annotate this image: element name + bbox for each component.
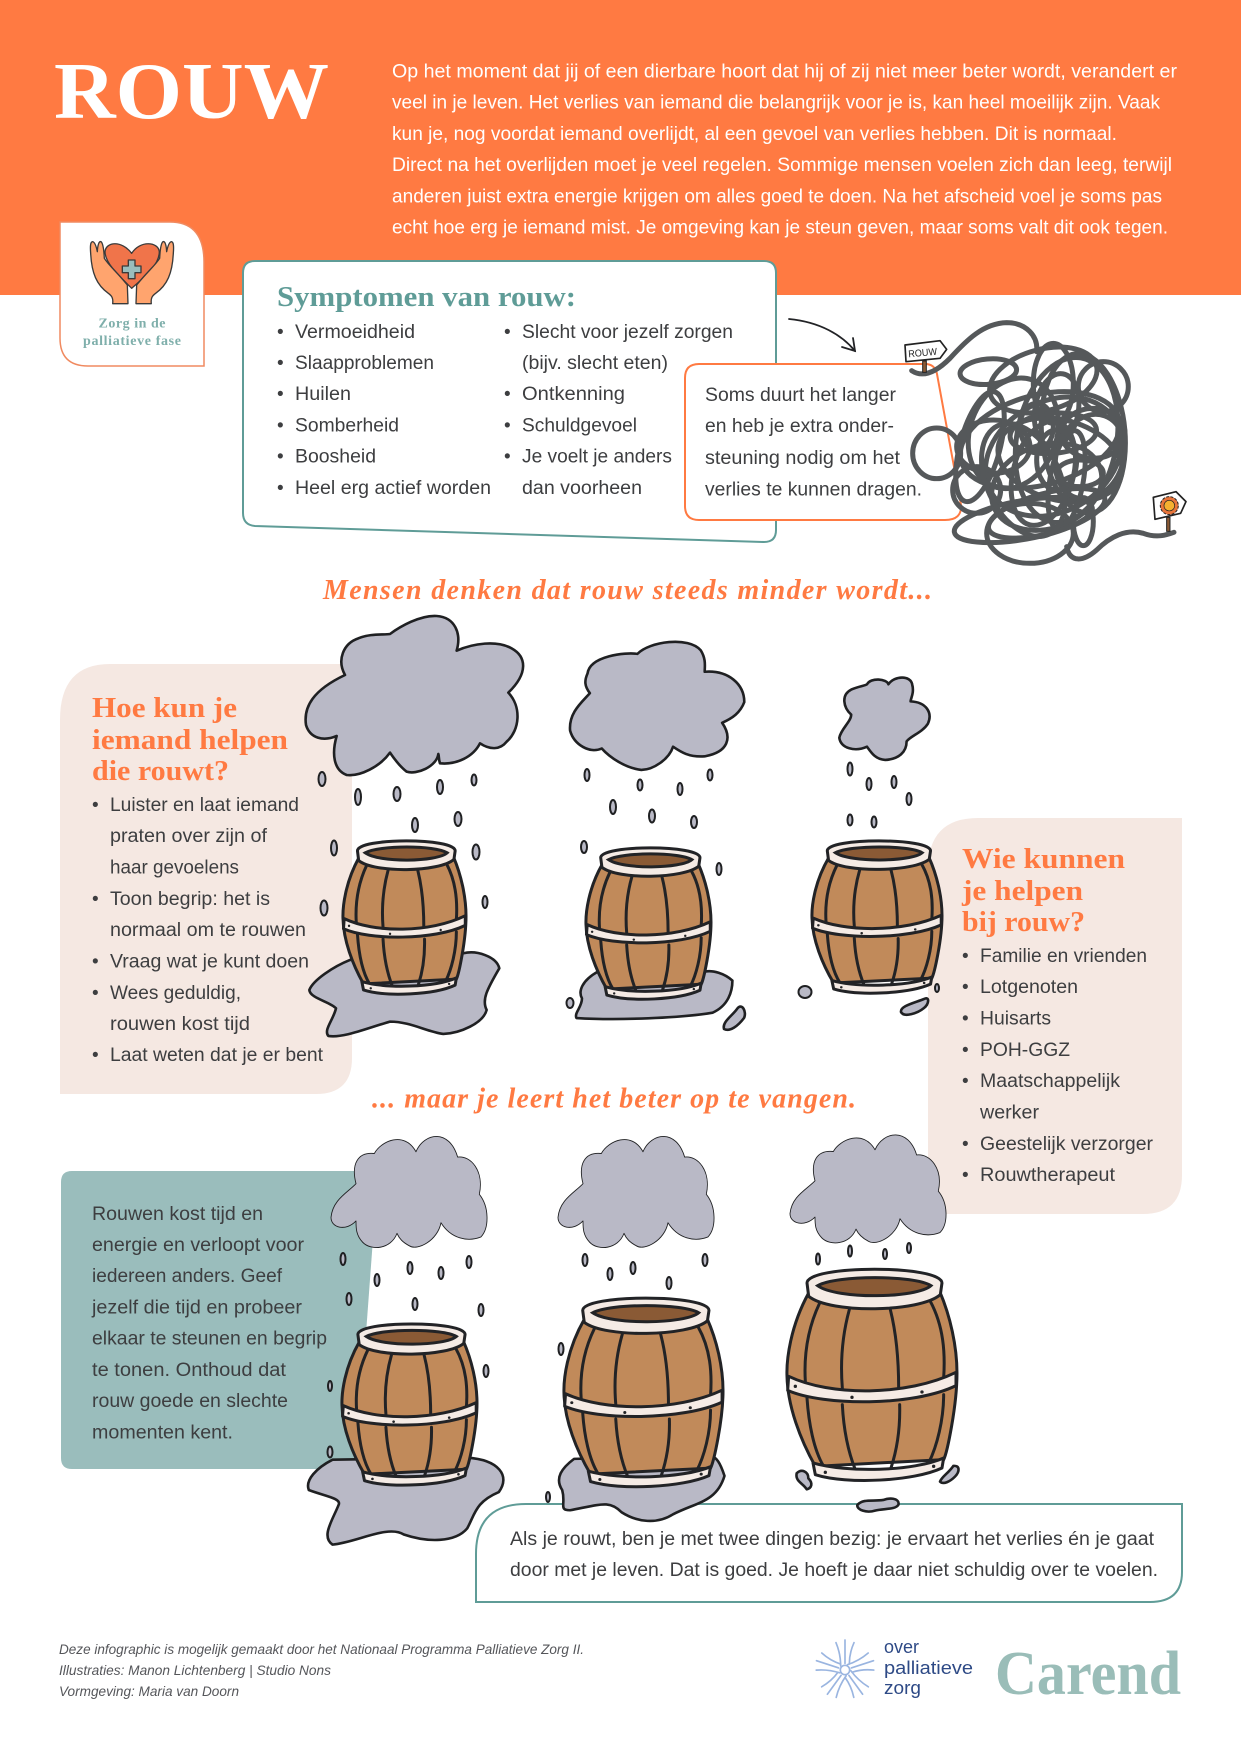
symptom list column 1: Boosheid: [295, 446, 376, 468]
symptom list column 1: •: [277, 384, 284, 405]
symptom list column 1: •: [277, 478, 284, 499]
text: wie kunnen je helpen: [961, 843, 1154, 1186]
list: helpers: POH-GGZ: [980, 1040, 1070, 1061]
symptom list column 2: Schuldgevoel: [522, 416, 637, 436]
intro text: kun je, nog voordat iemand overlijdt, al een gevoel van verlies hebben. Dit is normaal.: [392, 124, 1117, 145]
text: rouwen kost tijd: [91, 1204, 327, 1444]
orange header band: [0, 0, 1241, 295]
list: helpers: •: [962, 946, 969, 967]
illustration: barrel 2 medium cloud: [566, 642, 745, 1030]
symptom list column 2: •: [504, 322, 511, 343]
illustration: barrel 4: [308, 1136, 503, 1545]
symptom list column 2: •: [504, 416, 511, 436]
list: helpers: •: [962, 1008, 969, 1030]
intro text: echt hoe erg je iemand mist. Je omgeving kan je steun geven, maar soms valt dit ook tegen.: [392, 218, 1168, 238]
list: hulp tips: Vraag wat je kunt doen: [110, 952, 309, 972]
text: hoe kun je iemand helpen: [92, 692, 324, 1066]
symptom list column 2: [504, 322, 733, 499]
list: helpers: •: [962, 1165, 969, 1186]
list: hulp tips: normaal om te rouwen: [110, 920, 306, 941]
heading: hoe kun je: Hoe kun je: [92, 692, 237, 724]
list: hulp tips: Wees geduldig,: [110, 983, 241, 1004]
panel: teal message background: [61, 1171, 378, 1469]
list: hulp tips: •: [92, 952, 99, 972]
callout: soms duurt het langer: steuning nodig om het: [705, 448, 901, 469]
intro text: Direct na het overlijden moet je veel regelen. Sommige mensen voelen zich dan leeg, terwijl: [392, 155, 1172, 176]
footer credits: Illustraties: Manon Lichtenberg | Studio Nons: [59, 1662, 331, 1678]
heading: wie kunnen: je helpen: [961, 875, 1083, 907]
intro text: [392, 62, 1178, 238]
logo: over palliatieve zorg: [814, 1637, 973, 1700]
list: hulp tips: •: [92, 795, 99, 816]
logo: carend: Carend: [995, 1640, 1181, 1708]
symptom list column 1: •: [277, 416, 284, 436]
list: hulp tips: [92, 795, 324, 1066]
heading: hoe kun je: iemand helpen: [92, 724, 288, 756]
heading: mensen denken: Mensen denken dat rouw steeds minder wordt...: [322, 575, 932, 606]
illustration: barrel 1 big cloud: [306, 616, 523, 1036]
logo card: zorg in de palliatieve fase: Zorg in de: [98, 316, 166, 332]
list: hulp tips: •: [92, 889, 99, 910]
icon: hands holding heart: [90, 242, 174, 304]
logo card: zorg in de palliatieve fase: palliatieve fase: [83, 334, 181, 349]
heading: hoe kun je: die rouwt?: [92, 755, 229, 787]
list: hulp tips: •: [92, 1045, 99, 1066]
text: rouwen kost tijd: energie en verloopt voor: [92, 1235, 305, 1256]
logo: over palliatieve zorg: zorg: [884, 1678, 921, 1698]
symptom list column 1: Huilen: [295, 384, 351, 405]
symptom list column 1: [277, 322, 491, 499]
list: hulp tips: Laat weten dat je er bent: [110, 1045, 324, 1066]
tangled line from rouw to sun: [905, 323, 1186, 563]
symptom list column 2: Slecht voor jezelf zorgen: [522, 322, 733, 343]
symptom list column 2: •: [504, 446, 511, 468]
intro text: veel in je leven. Het verlies van iemand die belangrijk voor je is, kan heel moeilijk zijn. Vaak: [392, 92, 1160, 114]
heading: wie kunnen: [961, 843, 1125, 938]
callout: soms duurt het langer: [685, 364, 961, 520]
panel: wie kunnen je helpen background: [928, 818, 1182, 1214]
symptom list column 2: (bijv. slecht eten): [522, 353, 668, 374]
callout: twee dingen: [476, 1504, 1182, 1602]
list: helpers: [962, 946, 1154, 1186]
list: helpers: •: [962, 1071, 969, 1092]
symptom list column 1: •: [277, 446, 284, 468]
logo card: zorg in de palliatieve fase: [60, 222, 204, 366]
symptom list column 2: dan voorheen: [522, 478, 642, 499]
callout: twee dingen: Als je rouwt, ben je met twee dingen bezig: je ervaart het verlies én je gaat: [510, 1529, 1155, 1550]
callout: twee dingen: door met je leven. Dat is goed. Je hoeft je daar niet schuldig over te voelen.: [510, 1560, 1158, 1581]
symptom list column 1: •: [277, 353, 284, 374]
logo: over palliatieve zorg: over: [884, 1637, 919, 1657]
list: hulp tips: Toon begrip: het is: [110, 889, 270, 910]
list: helpers: werker: [979, 1102, 1040, 1124]
symptom list column 1: •: [277, 322, 284, 343]
list: helpers: Rouwtherapeut: [980, 1165, 1116, 1186]
illustration: barrel 5: [546, 1136, 724, 1521]
heading: symptomen: Symptomen van rouw:: [277, 281, 576, 313]
intro text: anderen juist extra energie krijgen om alles goed te doen. Na het afscheid voel je soms pas: [392, 186, 1162, 208]
sign: rouw: ROUW: [908, 347, 938, 360]
panel: hoe kun je iemand helpen background: [60, 664, 352, 1094]
list: helpers: Lotgenoten: [980, 977, 1078, 998]
list: helpers: Familie en vrienden: [980, 946, 1147, 967]
list: helpers: •: [962, 977, 969, 998]
symptom list column 1: Slaapproblemen: [295, 353, 434, 374]
text: rouwen kost tijd: jezelf die tijd en probeer: [91, 1298, 303, 1318]
text: rouwen kost tijd: elkaar te steunen en begrip: [92, 1328, 327, 1350]
text: rouwen kost tijd: iedereen anders. Geef: [92, 1266, 283, 1287]
footer credits: Deze infographic is mogelijk gemaakt door het Nationaal Programma Palliatieve Zorg II.: [59, 1641, 584, 1657]
heading: wie kunnen: Wie kunnen: [962, 843, 1125, 875]
callout: soms duurt het langer: verlies te kunnen dragen.: [705, 480, 922, 500]
list: hulp tips: •: [92, 983, 99, 1004]
callout: soms duurt het langer: Soms duurt het langer: [705, 385, 897, 406]
text: rouwen kost tijd: Rouwen kost tijd en: [92, 1204, 263, 1225]
intro text: Op het moment dat jij of een dierbare hoort dat hij of zij niet meer beter wordt, verandert er: [392, 62, 1178, 82]
symptom list column 2: Ontkenning: [522, 384, 625, 405]
heading: maar je leert: ... maar je leert het beter op te vangen.: [372, 1084, 856, 1114]
list: helpers: •: [962, 1040, 969, 1061]
panel: symptomen van rouw: [243, 261, 776, 542]
arrow to callout: [789, 319, 855, 351]
symptom list column 1: Vermoeidheid: [295, 322, 415, 343]
list: hulp tips: haar gevoelens: [110, 858, 239, 878]
illustration: barrel 6: [787, 1135, 959, 1512]
title: ROUW: [54, 48, 329, 136]
list: hulp tips: rouwen kost tijd: [110, 1014, 250, 1035]
list: helpers: Huisarts: [980, 1008, 1051, 1030]
list: helpers: •: [962, 1134, 969, 1155]
icon: star: [814, 1640, 876, 1700]
text: rouwen kost tijd: momenten kent.: [92, 1422, 233, 1444]
callout: soms duurt het langer: en heb je extra onder-: [705, 416, 894, 437]
heading: hoe kun je: [92, 692, 288, 787]
text: rouwen kost tijd: rouw goede en slechte: [92, 1391, 288, 1412]
illustration: barrel 3 small cloud: [798, 678, 942, 1015]
list: helpers: Geestelijk verzorger: [980, 1134, 1154, 1155]
list: hulp tips: praten over zijn of: [110, 826, 268, 847]
text: rouwen kost tijd: te tonen. Onthoud dat: [92, 1360, 287, 1381]
heading: wie kunnen: bij rouw?: [962, 906, 1085, 938]
symptom list column 2: •: [504, 384, 511, 405]
sign: rouw: [905, 341, 947, 372]
symptom list column 1: Somberheid: [295, 416, 399, 436]
footer credits: [59, 1641, 584, 1699]
symptom list column 1: Heel erg actief worden: [295, 478, 491, 499]
symptom list column 2: Je voelt je anders: [522, 446, 672, 468]
sign: sun: [1153, 492, 1186, 531]
logo: over palliatieve zorg: palliatieve: [884, 1658, 973, 1678]
footer credits: Vormgeving: Maria van Doorn: [59, 1683, 239, 1699]
list: helpers: Maatschappelijk: [980, 1071, 1121, 1092]
list: hulp tips: Luister en laat iemand: [110, 795, 299, 816]
